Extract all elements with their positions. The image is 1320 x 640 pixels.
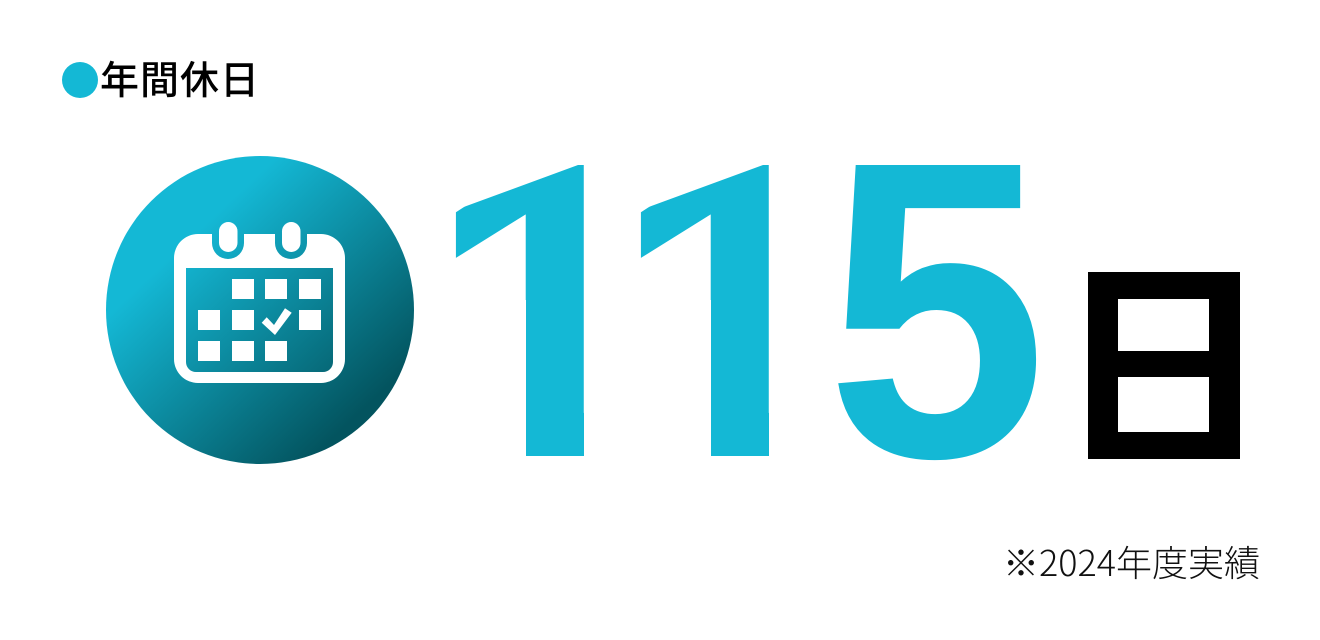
calendar rings — [219, 222, 300, 252]
footnote: ※2024年度実績 — [1003, 535, 1260, 587]
calendar body — [174, 234, 345, 383]
calendar date cells — [198, 279, 321, 361]
unit: days: 日 — [1058, 207, 1271, 502]
infographic — [62, 60, 1258, 580]
digit 5: 5 — [826, 73, 1047, 546]
big number 115 — [456, 165, 1036, 460]
heading: annual holidays — [62, 50, 260, 106]
badge circle — [106, 156, 414, 464]
calendar check mark — [262, 308, 292, 335]
heading text: 年間休日 — [100, 50, 260, 106]
heading bullet — [62, 62, 98, 98]
digit 1: 1 — [612, 73, 847, 546]
digit 1: 1 — [427, 73, 662, 546]
icon: calendar badge — [106, 156, 414, 464]
